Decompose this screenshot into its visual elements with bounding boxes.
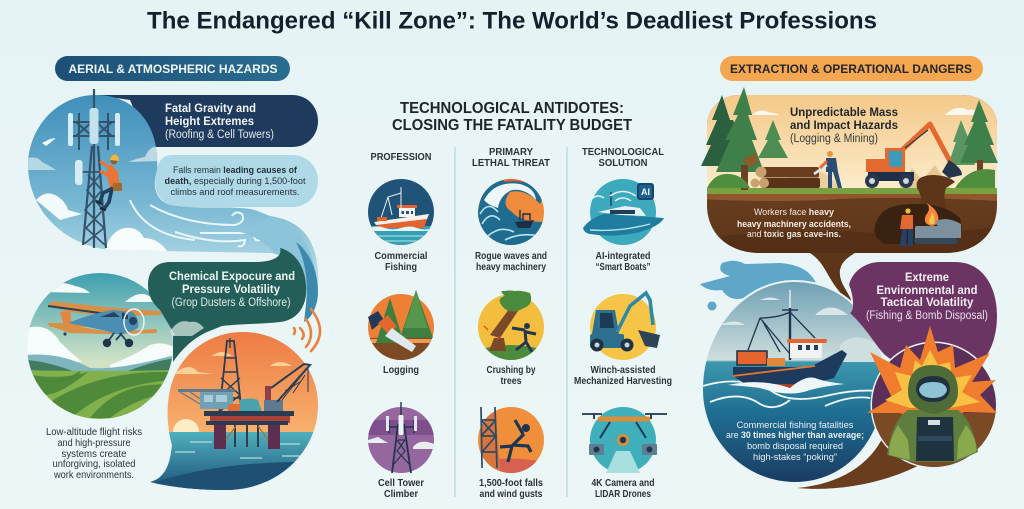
panel: extraction and operational dangers [700, 56, 1000, 489]
banner: extreme environmental volatility: Tactical Volatility [880, 297, 974, 309]
mine cave [874, 175, 962, 246]
AI chip: AI [641, 187, 650, 197]
text: low-altitude flight risks: systems create [62, 449, 127, 460]
banner: extreme environmental volatility: (Fishing & Bomb Disposal) [866, 310, 988, 322]
column heading: technological solution [582, 146, 665, 169]
icon: smart boat with AI chip [583, 179, 664, 245]
column heading: primary lethal threat: PRIMARY [489, 146, 533, 158]
banner: fatal gravity: Fatal Gravity and [165, 103, 256, 115]
banner: extreme environmental volatility: Environmental and [876, 285, 978, 297]
label: smart boats [596, 251, 650, 273]
icon: rogue wave [478, 175, 545, 246]
label: rogue waves [475, 251, 547, 273]
text pill: falls explanation [155, 155, 318, 207]
label: rogue waves: heavy machinery [476, 262, 546, 273]
illustration: logging and mining cross-section: heavy machinery accidents, [737, 219, 851, 230]
text: low-altitude flight risks: Low-altitude flight risks [46, 427, 142, 438]
text: low-altitude flight risks [46, 427, 142, 481]
illustration: logging and mining cross-section: and Impact Hazards [790, 120, 898, 132]
worker [96, 154, 122, 210]
icon: falling tree [478, 290, 544, 362]
plane [47, 302, 162, 347]
label: falls and wind gusts: and wind gusts [480, 489, 543, 500]
icon: falling climber [478, 402, 544, 475]
label: crushing by trees: trees [500, 376, 522, 387]
label: logging: Logging [383, 365, 419, 376]
logger with chainsaw [814, 151, 842, 188]
icon: logging chainsaw [368, 290, 434, 362]
banner: chemical exposure: Chemical Expocure and [169, 271, 295, 283]
column heading: technological solution: TECHNOLOGICAL [582, 146, 665, 158]
label: cell tower climber [378, 478, 424, 500]
illustration: bomb disposal technician [867, 326, 1000, 473]
label: crushing by trees: Crushing by [486, 365, 536, 376]
banner: fatal gravity [96, 95, 318, 147]
banner: chemical exposure [148, 242, 318, 362]
text: low-altitude flight risks: unforgiving, isolated [52, 459, 136, 470]
heading pill: aerial hazards [55, 56, 290, 81]
oil rig [178, 338, 310, 449]
panel: technological antidotes table [368, 100, 672, 500]
illustration: logging and mining cross-section: (Logging & Mining) [790, 133, 878, 145]
icon: camera and lidar drone [582, 407, 667, 473]
illustration: fishing boat at sea: high-stakes “poking” [753, 452, 837, 463]
illustration: splash above fishing boat [700, 261, 816, 299]
banner: extreme environmental volatility [849, 262, 997, 370]
label: 4k camera drones: 4K Camera and [592, 478, 654, 489]
icon: cell tower [368, 402, 434, 473]
illustration: crop duster plane [27, 273, 178, 420]
illustration: logging and mining cross-section: and toxic gas cave-ins. [747, 229, 841, 240]
label: cell tower climber: Cell Tower [378, 478, 424, 489]
text: low-altitude flight risks: and high-pressure [58, 438, 131, 449]
icon: fishing boat [368, 179, 434, 246]
heading: technological antidotes: TECHNOLOGICAL ANTIDOTES: [400, 100, 624, 117]
banner: fatal gravity: (Roofing & Cell Towers) [165, 129, 274, 141]
label: commercial fishing: Fishing [385, 262, 417, 273]
heading: technological antidotes [392, 100, 632, 134]
label: 4k camera drones [592, 478, 654, 500]
text pill: falls explanation: death, especially during 1,500-foot [164, 176, 306, 187]
illustration: brown ground swoosh [797, 435, 925, 489]
illustration: fishing boat at sea: are 30 times higher than average; [726, 430, 864, 441]
title: The Endangered “Kill Zone”: The World’s Deadliest Professions [147, 8, 877, 34]
label: smart boats: AI-integrated [596, 251, 650, 262]
heading pill: extraction dangers [720, 56, 983, 81]
banner: extreme environmental volatility: Extreme [905, 272, 949, 284]
icon: signal waves [294, 309, 320, 351]
illustration: logging and mining cross-section: Unpredictable Mass [790, 107, 898, 119]
illustration: fishing boat at sea: bomb disposal required [747, 441, 843, 452]
label: winch-assisted harvesting: Mechanized Harvesting [574, 376, 672, 387]
label: smart boats: “Smart Boats” [596, 262, 650, 273]
illustration: logging and mining cross-section [700, 87, 1000, 306]
heading pill: aerial hazards: AERIAL & ATMOSPHERIC HAZARDS [68, 62, 278, 76]
banner: fatal gravity: Height Extremes [165, 116, 254, 128]
column heading: primary lethal threat [472, 146, 551, 169]
banner: chemical exposure: Pressure Volatility [182, 284, 281, 296]
illustration: logging and mining cross-section: Workers face heavy [754, 207, 835, 218]
illustration: fishing boat at sea: Commercial fishing fatalities [736, 420, 854, 431]
text pill: falls explanation: climbs and roof measurements. [170, 187, 300, 198]
label: commercial fishing: Commercial [374, 251, 428, 262]
text pill: falls explanation: Falls remain leading causes of [173, 165, 298, 176]
label: winch-assisted harvesting: Winch-assisted [590, 365, 656, 376]
illustration: cell tower climber [28, 89, 318, 290]
label: falls and wind gusts: 1,500-foot falls [479, 478, 543, 489]
boat [728, 290, 847, 394]
label: falls and wind gusts [479, 478, 543, 500]
column heading: technological solution: SOLUTION [598, 157, 648, 169]
heading pill: extraction dangers: EXTRACTION & OPERATIONAL DANGERS [730, 62, 972, 76]
label: rogue waves: Rogue waves and [475, 251, 547, 262]
logs [750, 166, 820, 188]
label: 4k camera drones: LIDAR Drones [595, 489, 651, 500]
column heading: primary lethal threat: LETHAL THREAT [472, 157, 551, 169]
panel: aerial and atmospheric hazards [27, 56, 330, 495]
label: commercial fishing [374, 251, 428, 273]
illustration: fishing boat at sea [703, 282, 890, 482]
label: crushing by trees [486, 365, 536, 387]
tower [70, 89, 118, 248]
label: winch-assisted harvesting [574, 365, 672, 387]
heading: technological antidotes: CLOSING THE FATALITY BUDGET [392, 117, 632, 134]
trees [701, 87, 998, 190]
icon: mechanized harvester [590, 293, 660, 360]
excavator [865, 124, 962, 188]
text: low-altitude flight risks: work environments. [53, 470, 134, 481]
column heading: profession: PROFESSION [370, 151, 432, 163]
banner: chemical exposure: (Grop Dusters & Offshore) [172, 297, 291, 309]
label: cell tower climber: Climber [384, 489, 418, 500]
illustration: offshore oil platform [150, 308, 322, 490]
